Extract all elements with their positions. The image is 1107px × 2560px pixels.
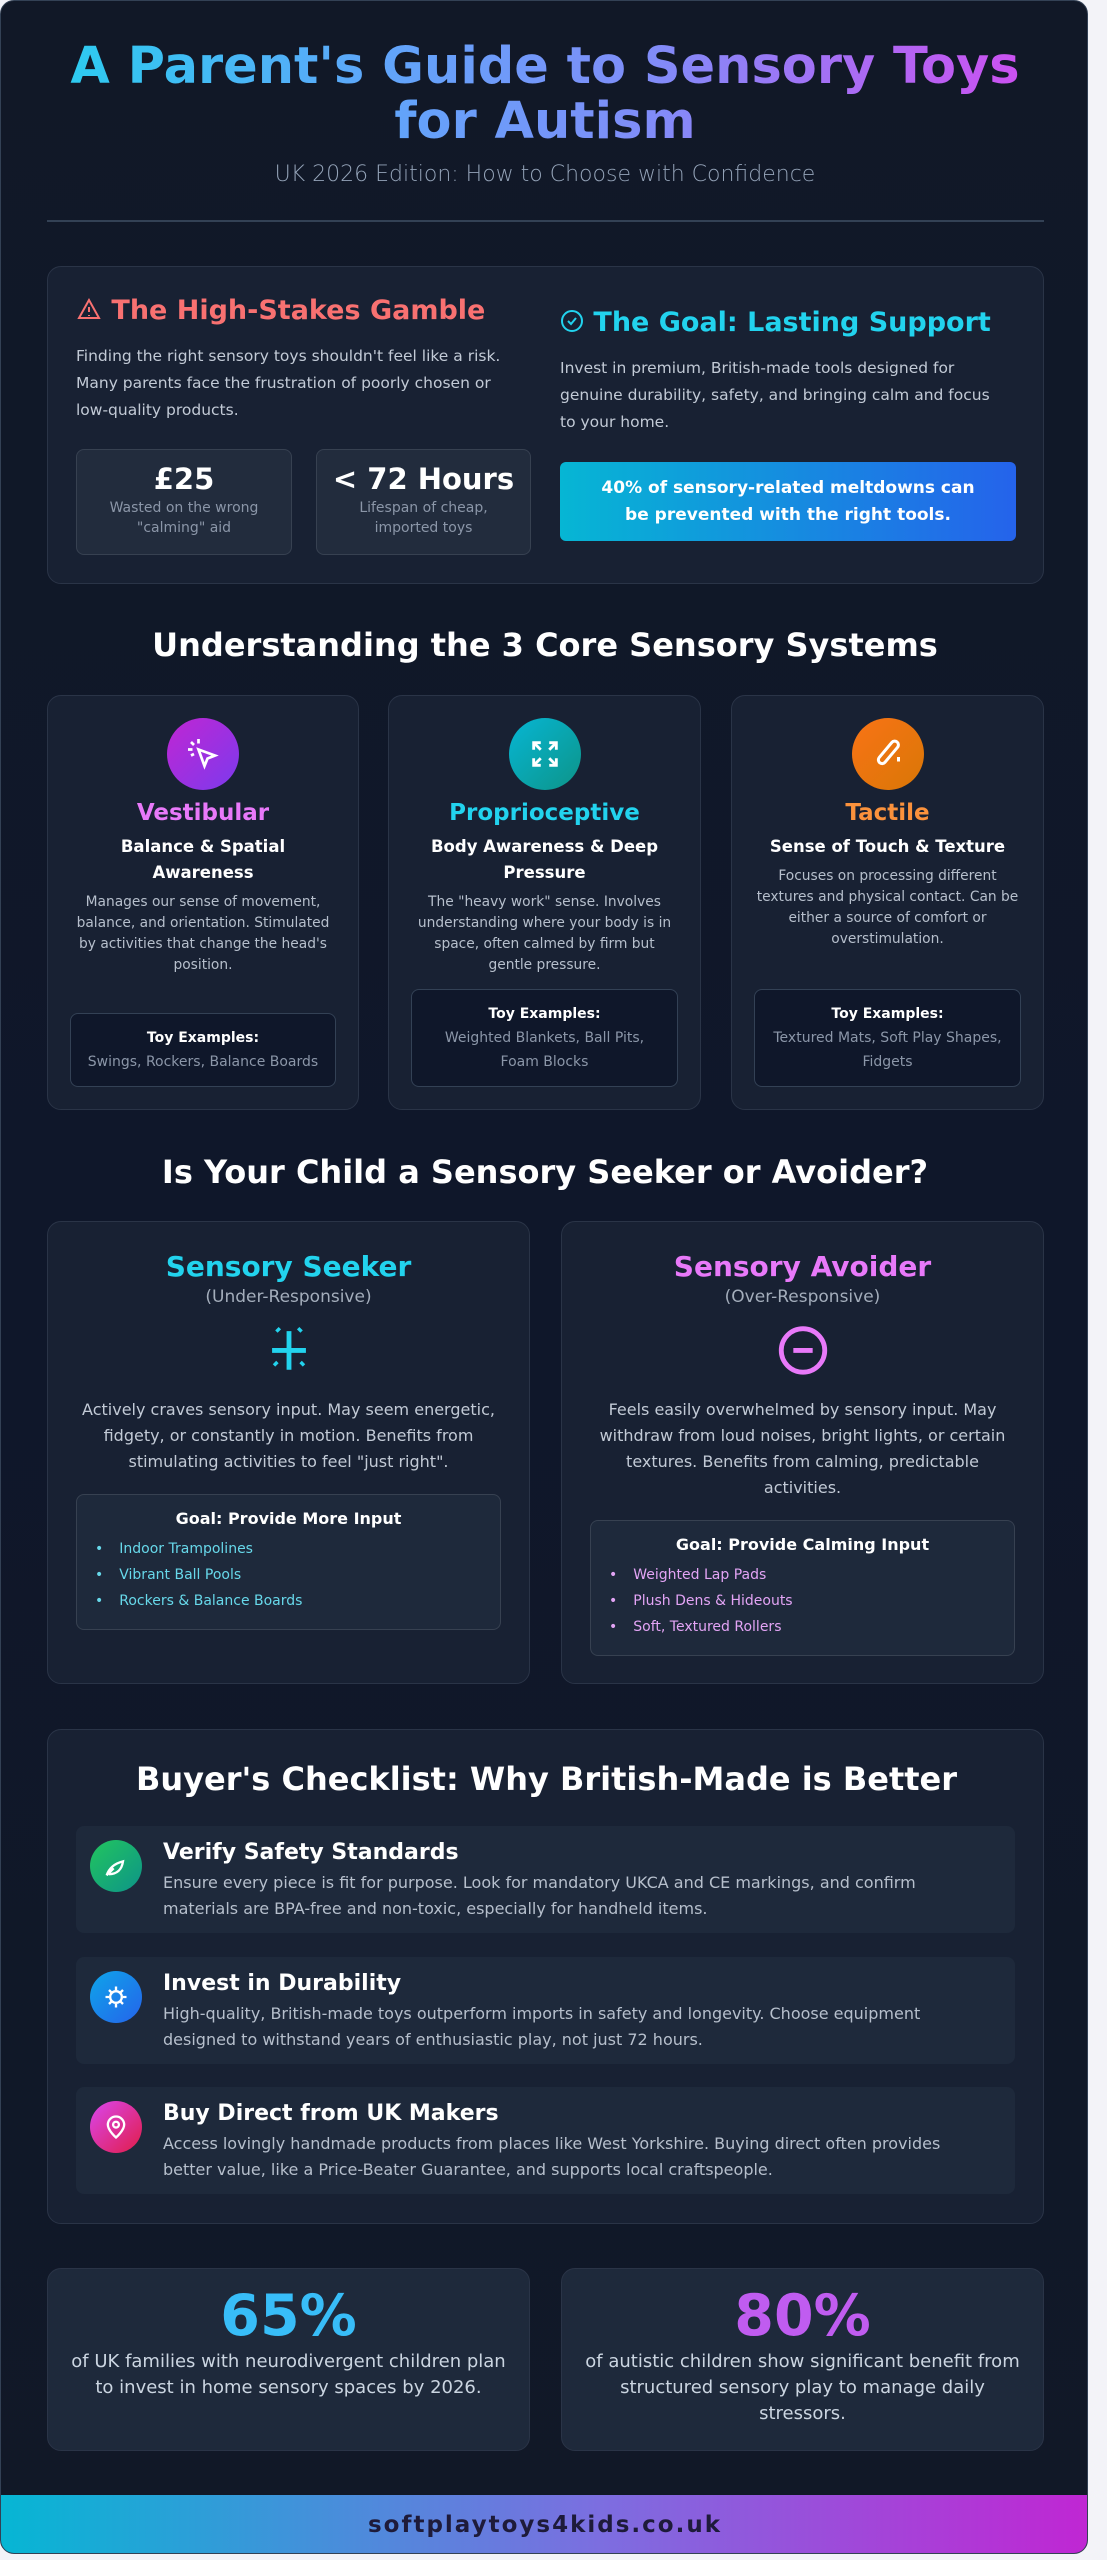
panel: vestibular [47,695,359,1110]
icon: expand arrows [508,718,580,790]
panel: sensory seeker: Actively craves sensory input. May seem energetic, fidgety, or constantly in motion. Benefits from stimulating activities to feel "just right". [82,1400,495,1471]
item: buy direct: Buy Direct from UK Makers [163,2101,499,2126]
stat: 65%: 65% [220,2283,357,2349]
title: for Autism [394,92,696,151]
toy examples: Toy Examples: [831,1006,944,1022]
item: safety: Ensure every piece is fit for purpose. Look for mandatory UKCA and CE markings, and confirm materials are BPA-free and non-toxic, especially for handheld items. [163,1873,916,1918]
stat: 72 hours: Lifespan of cheap, [359,500,488,516]
stat: £25: £25 [154,462,214,496]
panel: tactile: Tactile [845,800,930,826]
item: buy direct [76,2087,1015,2194]
stat: 72 hours: < 72 Hours [333,462,514,496]
panel: tactile [731,695,1044,1110]
panel: tactile: Sense of Touch & Texture [770,837,1005,856]
icon: plus [272,1327,306,1370]
stat: 80% [561,2268,1044,2451]
heading: Buyer's Checklist: Why British-Made is Better [136,1760,957,1798]
goal box: more input: Vibrant Ball Pools [119,1567,241,1583]
goal box: more input: Rockers & Balance Boards [119,1593,302,1609]
panel: sensory avoider: Sensory Avoider [674,1250,931,1283]
panel: sensory avoider: (Over-Responsive) [725,1287,880,1307]
panel: intro [47,266,1044,584]
callout: 40% [560,462,1016,541]
toy examples: Toy Examples: [488,1006,601,1022]
callout: 40%: 40% of sensory-related meltdowns can [601,478,975,498]
stat: 80%: of autistic children show significant benefit from structured sensory play to manage daily stressors. [585,2351,1020,2424]
icon: chip [90,1971,142,2023]
heading: seeker or avoider: Is Your Child a Sensory Seeker or Avoider? [162,1153,928,1191]
stat: 72 hours [316,449,531,555]
stat: 80%: 80% [734,2283,871,2349]
toy examples [754,989,1021,1087]
item: safety [76,1826,1015,1933]
panel: proprioceptive: Proprioceptive [449,800,640,826]
subtitle: UK 2026 Edition: How to Choose with Confidence [275,162,815,187]
title: A Parent's Guide to Sensory Toys [70,37,1020,96]
text: gamble body: Finding the right sensory toys shouldn't feel like a risk. Many parents face the frustration of poorly chosen or low-quality products. [76,347,500,419]
panel: sensory avoider: Feels easily overwhelmed by sensory input. May withdraw from loud noises, bright lights, or certain textures. Benefits from calming, predictable activities. [600,1400,1005,1497]
footer: softplaytoys4kids.co.uk [368,2512,722,2538]
toy examples: Toy Examples: [147,1030,259,1046]
item: buy direct: Access lovingly handmade products from places like West Yorkshire. Buying direct often provides better value, like a Price-Beater Guarantee, and supports local craftspeople. [163,2134,940,2179]
goal box: more input [76,1494,501,1630]
stat: 72 hours: imported toys [375,520,472,536]
panel: buyer's checklist [47,1729,1044,2224]
stat: 65% [47,2268,530,2451]
icon: brush [852,718,924,790]
heading: core sensory systems: Understanding the 3 Core Sensory Systems [152,626,938,664]
icon: leaf [90,1840,142,1892]
panel: sensory seeker: Sensory Seeker [166,1250,411,1283]
icon: minus circle [778,1326,828,1375]
callout: 40%: be prevented with the right tools. [625,505,951,525]
item: durability: Invest in Durability [163,1971,401,1996]
panel: sensory avoider [561,1221,1044,1684]
panel: sensory seeker: (Under-Responsive) [205,1287,372,1307]
stat: £25 [76,449,292,555]
icon: map pin [90,2101,142,2153]
goal box: calming input: Weighted Lap Pads [633,1567,766,1583]
panel: proprioceptive [388,695,701,1110]
item: durability [76,1957,1015,2064]
panel: vestibular: Manages our sense of movement, balance, and orientation. Stimulated by activities that change the head's position. [77,894,329,973]
toy examples: Textured Mats, Soft Play Shapes, [773,1030,1002,1046]
goal box: more input: Indoor Trampolines [119,1541,253,1557]
item: safety: Verify Safety Standards [163,1840,459,1865]
icon: cursor click [167,718,239,790]
panel: vestibular: Vestibular [137,800,269,826]
toy examples: Foam Blocks [501,1054,588,1070]
stat: £25: "calming" aid [137,520,231,536]
goal box: calming input: Plush Dens & Hideouts [633,1593,793,1609]
goal box: calming input: Soft, Textured Rollers [633,1619,781,1635]
goal box: calming input [590,1520,1015,1656]
panel: vestibular: Balance & Spatial Awareness [121,837,285,882]
toy examples: Fidgets [862,1054,913,1070]
panel: tactile: Focuses on processing different textures and physical contact. Can be either a source of comfort or overstimulation. [757,868,1018,947]
text: goal body: Invest in premium, British-made tools designed for genuine durability, safety, and bringing calm and focus to your home. [560,359,990,431]
panel: proprioceptive: Body Awareness & Deep Pressure [431,837,658,882]
heading: the goal: The Goal: Lasting Support [593,307,991,338]
toy examples: Weighted Blankets, Ball Pits, [445,1030,644,1046]
title [1,39,1089,149]
toy examples: Swings, Rockers, Balance Boards [88,1054,318,1070]
stat: £25: Wasted on the wrong [110,500,258,516]
footer [1,2495,1089,2555]
goal box: more input: Goal: Provide More Input [176,1509,401,1528]
panel: proprioceptive: The "heavy work" sense. Involves understanding where your body is in space, often calmed by firm but gentle pressure. [418,894,671,973]
stat: 65%: of UK families with neurodivergent children plan to invest in home sensory spaces by 2026. [71,2351,506,2398]
panel: sensory seeker [47,1221,530,1684]
heading: high-stakes gamble: The High-Stakes Gamble [111,295,485,326]
toy examples [70,1013,336,1087]
goal box: calming input: Goal: Provide Calming Input [676,1535,929,1554]
toy examples [411,989,678,1087]
item: durability: High-quality, British-made toys outperform imports in safety and longevity. Choose equipment designed to withstand years of enthusiastic play, not just 72 hours. [163,2004,920,2049]
